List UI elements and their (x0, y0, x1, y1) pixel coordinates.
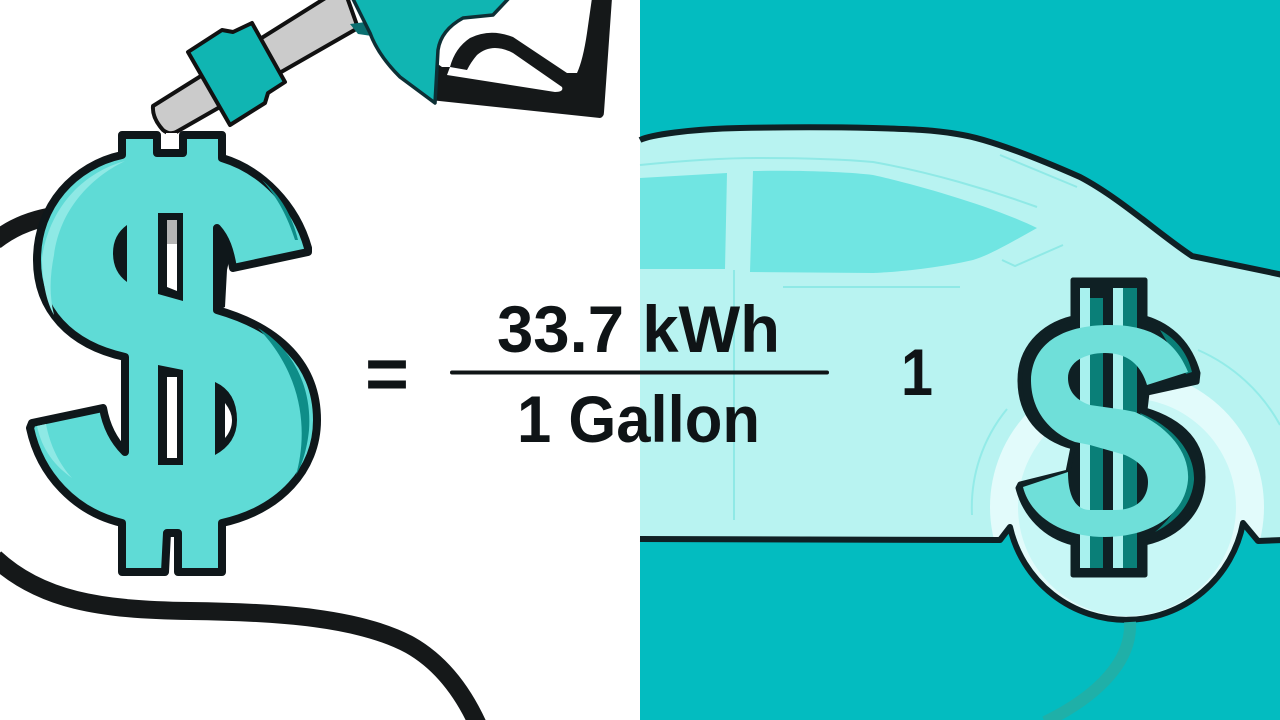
car detail lines (640, 155, 1077, 520)
fuel hose (0, 217, 478, 720)
wheel white ring (990, 386, 1264, 617)
wheel faint right arc (1198, 350, 1280, 425)
left light bar (1080, 288, 1090, 568)
nozzle trigger guard (430, 0, 612, 118)
nozzle joint (350, 22, 372, 36)
nozzle collar (188, 23, 285, 125)
lower slot opening (167, 377, 177, 458)
dollar lower highlight (37, 424, 72, 478)
panel: electric side background (640, 0, 1280, 720)
lower slot (158, 365, 183, 465)
upper left counter (113, 225, 127, 282)
panel: gasoline side background (0, 0, 640, 720)
right light bar (1113, 288, 1123, 568)
fraction bar (450, 370, 829, 374)
nozzle handle (352, 0, 510, 103)
wheel hub (1018, 398, 1236, 616)
dollar shadow (1140, 330, 1194, 532)
front car window (750, 171, 1037, 273)
charging cable (1045, 622, 1130, 720)
left dark bar (1090, 298, 1103, 568)
car underside and wheel arch outline (640, 523, 1280, 620)
numerator: 33.7 kWh (497, 292, 780, 366)
lower right counter opening (225, 403, 232, 438)
dollar body (30, 135, 317, 572)
icon: large dollar sign (30, 133, 317, 572)
right dark bar (1123, 288, 1137, 568)
upper slot (158, 213, 183, 301)
upper slot pipe reflection (167, 220, 177, 244)
car body (640, 127, 1280, 620)
dollar silhouette (1018, 280, 1203, 575)
rear car window (640, 173, 727, 269)
denominator: 1 Gallon (517, 382, 760, 456)
icon: fuel pump nozzle (153, 0, 612, 133)
wheel faint left arc (972, 409, 1007, 515)
upper slot opening (167, 220, 177, 291)
S curve (1023, 325, 1188, 537)
dollar highlight (42, 161, 125, 315)
car wheel (972, 350, 1280, 644)
equals sign: = (365, 332, 409, 415)
nozzle spout (153, 0, 358, 133)
numeral one: 1 (901, 335, 933, 409)
notch opening where fuel meets dollar (166, 133, 177, 145)
vertical bars (1080, 288, 1137, 568)
lower right counter (215, 382, 237, 455)
icon: small dollar sign on car (1018, 280, 1203, 575)
dollar shade (258, 328, 309, 475)
upper right counter (215, 228, 231, 312)
dollar upper shade (262, 180, 298, 240)
car roof outline (640, 127, 1280, 275)
guard opening (447, 48, 562, 92)
